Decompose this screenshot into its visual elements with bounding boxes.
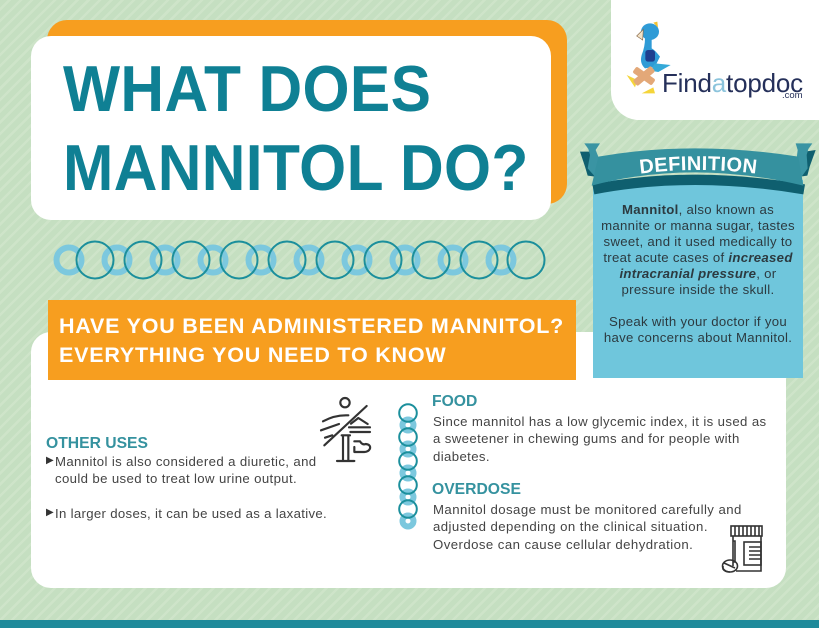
logo panel bbox=[611, 0, 819, 120]
vertical chain bbox=[398, 403, 418, 530]
bullet: ▶ bbox=[46, 455, 54, 466]
subtitle: HAVE YOU BEEN ADMINISTERED MANNITOL? bbox=[59, 314, 564, 338]
definition text: treat acute cases of increased bbox=[603, 250, 793, 265]
title panel bbox=[31, 36, 551, 220]
food text: diabetes. bbox=[433, 449, 490, 464]
icon: person crossed out bbox=[320, 396, 372, 462]
bullet text: could be used to treat low urine output. bbox=[55, 471, 297, 486]
definition panel bbox=[593, 180, 803, 378]
definition ribbon bbox=[580, 143, 816, 194]
food text: Since mannitol has a low glycemic index, it is used as bbox=[433, 414, 767, 429]
food block bbox=[432, 393, 767, 464]
content panel bbox=[31, 332, 786, 588]
bottom teal band bbox=[0, 620, 819, 628]
heading: other uses: OTHER USES bbox=[46, 435, 148, 452]
definition text bbox=[601, 202, 795, 345]
overdose text: adjusted depending on the clinical situation. bbox=[433, 519, 708, 534]
heading: food: FOOD bbox=[432, 393, 477, 410]
definition text: sweet, and it used medically to bbox=[604, 234, 792, 249]
icon: pill bottle bbox=[722, 525, 763, 573]
title: MANNITOL DO? bbox=[63, 130, 529, 204]
overdose block bbox=[432, 481, 742, 552]
food text bbox=[433, 414, 767, 464]
subtitle: EVERYTHING YOU NEED TO KNOW bbox=[59, 343, 446, 367]
definition text: pressure inside the skull. bbox=[622, 282, 774, 297]
ribbon label: DEFINITION bbox=[640, 156, 756, 174]
definition text: Mannitol, also known as bbox=[622, 202, 774, 217]
logo suffix: .com bbox=[782, 90, 803, 101]
title orange backing panel bbox=[47, 20, 567, 204]
overdose text: Overdose can cause cellular dehydration. bbox=[433, 537, 693, 552]
other uses block bbox=[46, 435, 327, 521]
definition text: have concerns about Mannitol. bbox=[604, 330, 792, 345]
logo wordmark: Findatopdoc bbox=[662, 68, 803, 98]
bullet text: In larger doses, it can be used as a laxative. bbox=[55, 506, 327, 521]
subtitle banner bbox=[48, 300, 576, 380]
title bbox=[63, 52, 529, 204]
subtitle bbox=[59, 314, 564, 367]
bullet text bbox=[55, 454, 316, 486]
chain decoration bbox=[54, 240, 546, 280]
heading: overdose: OVERDOSE bbox=[432, 481, 521, 498]
definition text: intracranial pressure, or bbox=[619, 266, 777, 281]
overdose text bbox=[433, 502, 742, 552]
icon: duck mascot bbox=[626, 22, 670, 94]
bullet text: Mannitol is also considered a diuretic, and bbox=[55, 454, 316, 469]
overdose text: Mannitol dosage must be monitored carefully and bbox=[433, 502, 742, 517]
food text: a sweetener in chewing gums and for people with bbox=[433, 431, 740, 446]
title: WHAT DOES bbox=[63, 52, 431, 125]
bullet: ▶ bbox=[46, 507, 54, 518]
definition text: mannite or manna sugar, tastes bbox=[601, 218, 795, 233]
definition text: Speak with your doctor if you bbox=[609, 314, 787, 329]
